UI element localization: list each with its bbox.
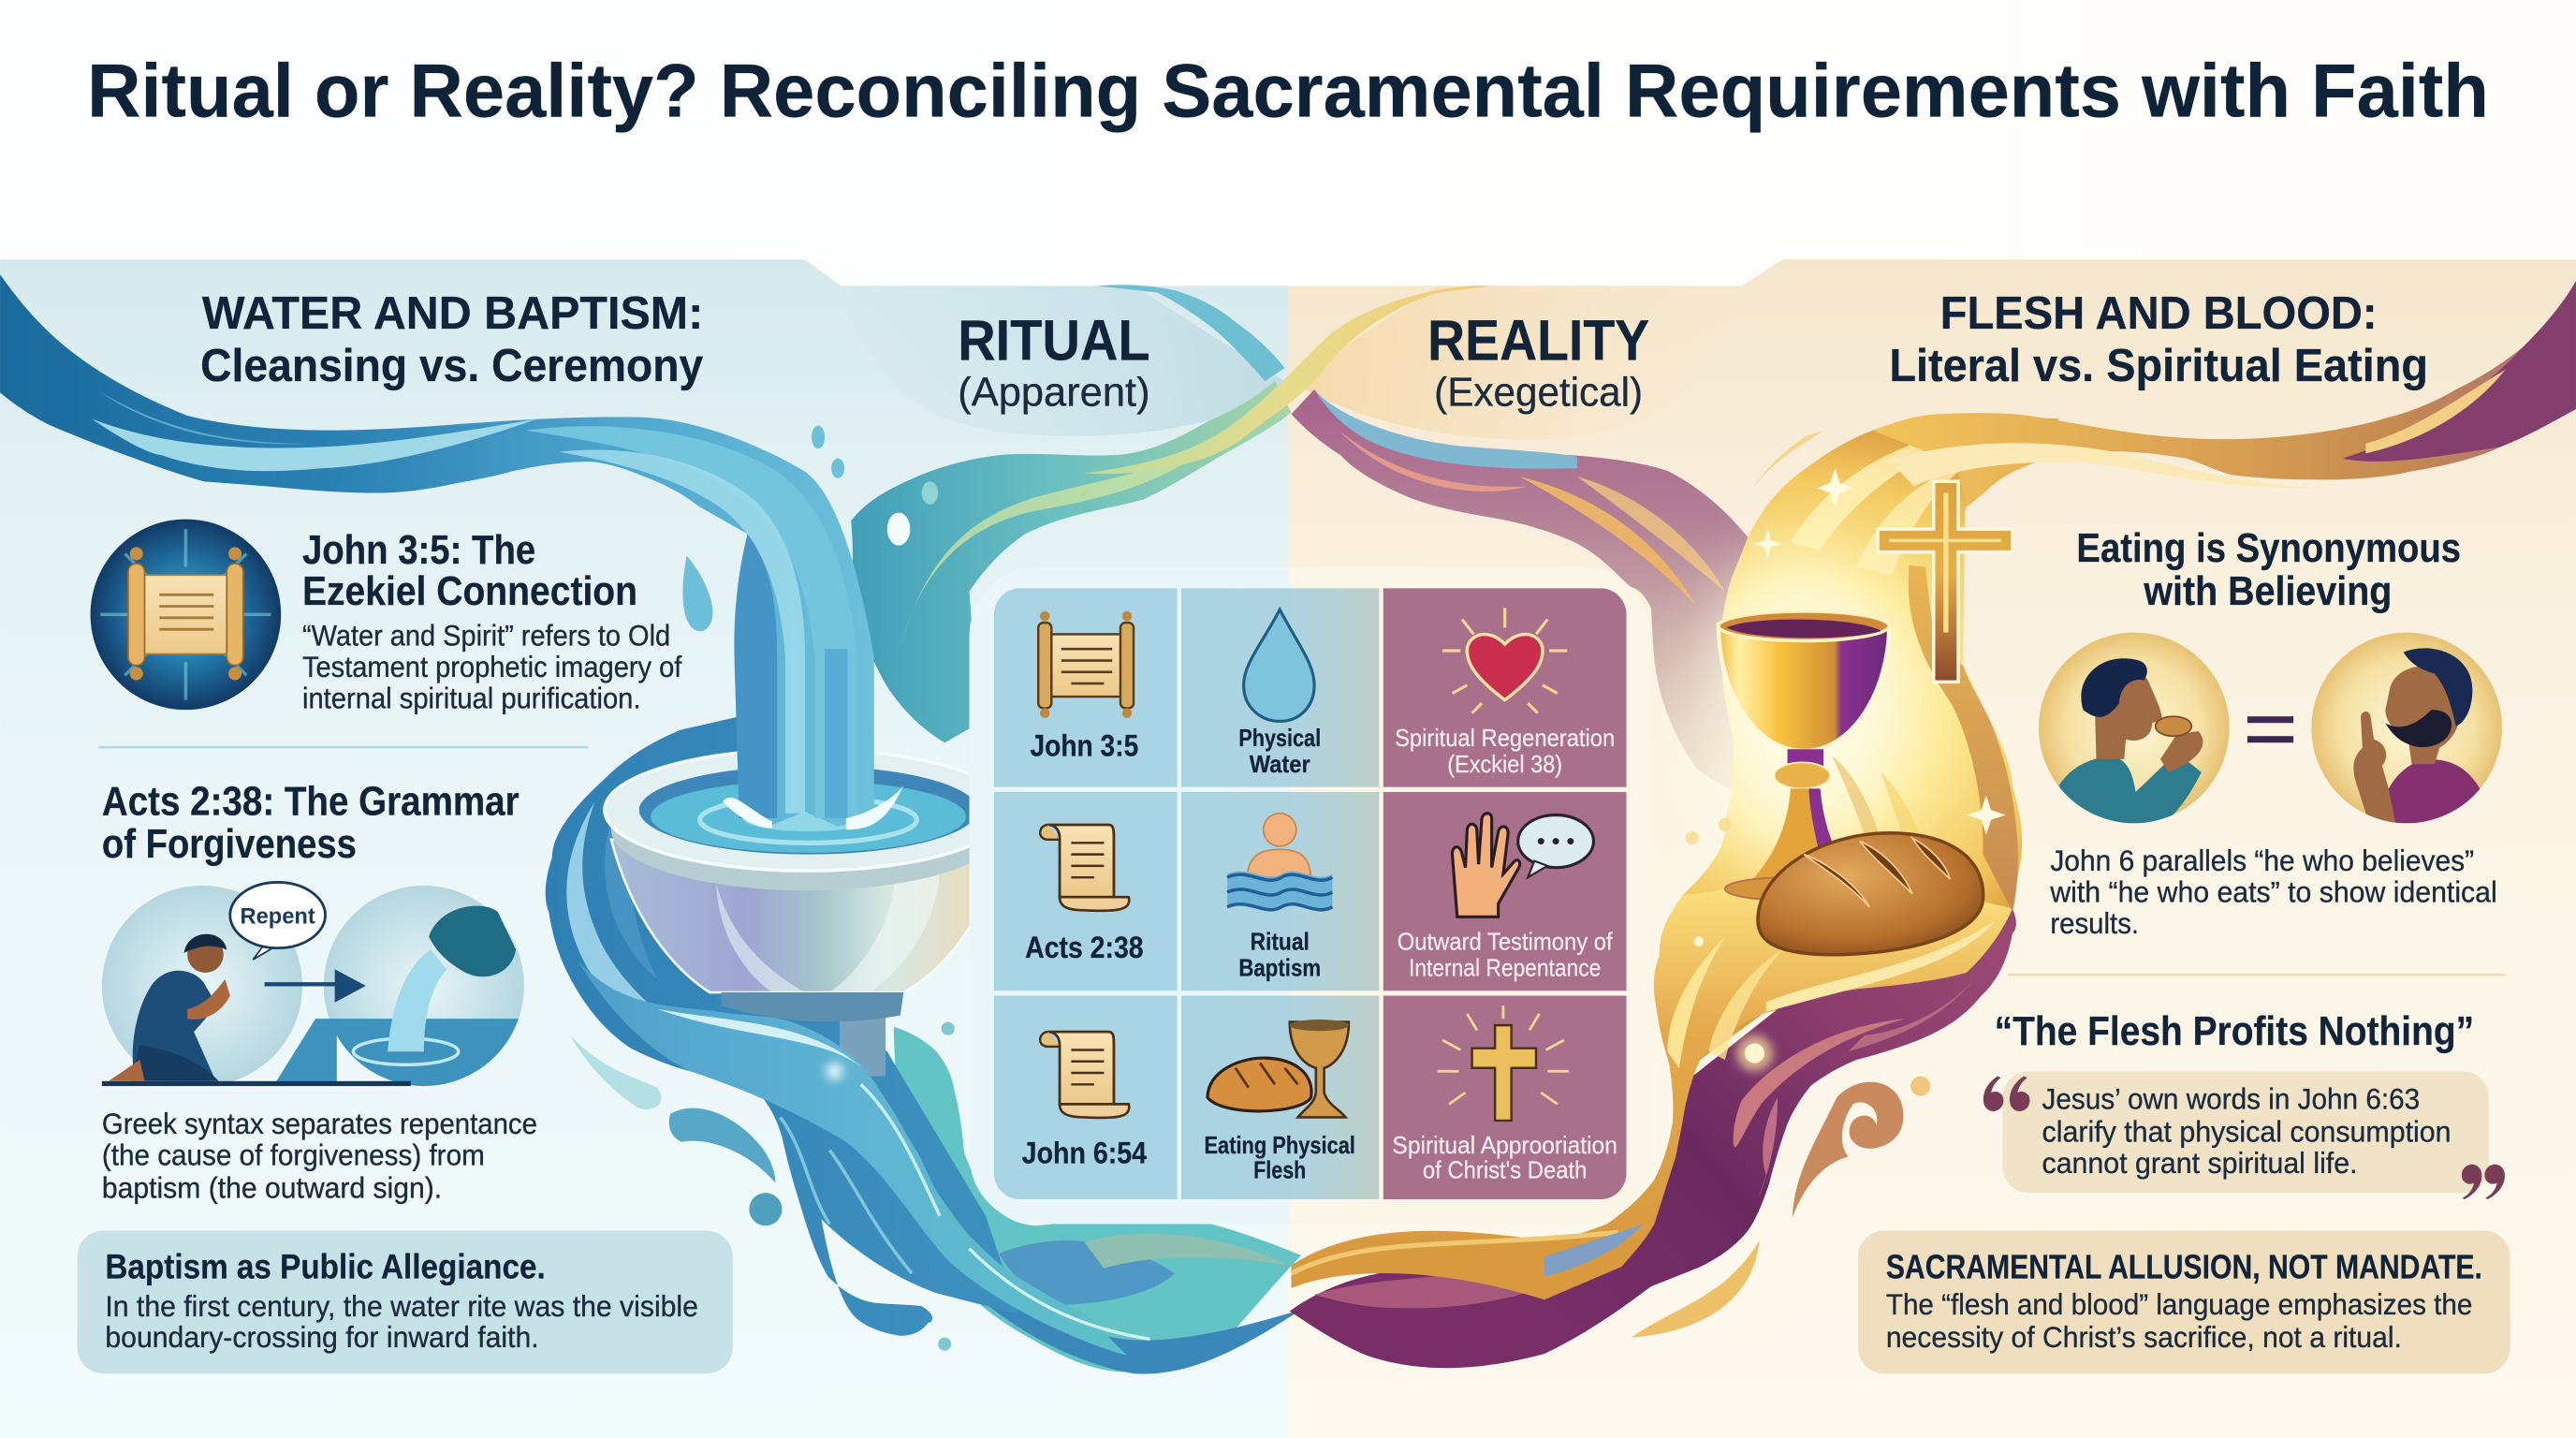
label: eating physical flesh [1204,1133,1355,1183]
centre heading: reality [1427,308,1649,415]
label: spiritual appropriation: Spiritual Approoriation [1392,1133,1617,1159]
centre swoosh: teal ribbon [851,381,1292,742]
front water stream over stem [578,961,1150,1356]
label: physical water: Physical [1238,726,1321,752]
quote box: Jesus’ own words in John 6:63 [2042,1082,2420,1116]
label: John 6:54: John 6:54 [1022,1137,1147,1170]
Acts 2:38 heading [102,778,520,867]
Greek syntax text: (the cause of forgiveness) from [102,1137,485,1171]
label: eating physical flesh: Eating Physical [1204,1133,1355,1159]
callout: sacramental allusion: The “flesh and blood” language emphasizes the [1886,1287,2472,1321]
label: outward testimony: Internal Repentance [1409,955,1601,981]
Acts 2:38 heading: of Forgiveness [102,821,357,867]
John 3:5 text block: John 3:5: The [302,527,535,573]
callout: public allegiance: Baptism as Public Allegiance. [105,1247,546,1285]
Acts 2:38 heading: Acts 2:38: The Grammar [102,778,520,824]
centre heading: reality: (Exegetical) [1434,369,1643,415]
John 6 text: results. [2050,906,2139,940]
icon: scroll John 3:5 [1038,611,1134,718]
bread loaf [1758,833,1983,955]
label: John 3:5: John 3:5 [1030,728,1138,762]
label: spiritual appropriation [1392,1133,1617,1183]
label: ritual baptism: Baptism [1238,955,1321,981]
comparison table [994,588,1627,1199]
table halo [970,566,1651,1224]
quote box [1983,1071,2505,1199]
label: outward testimony: Outward Testimony of [1398,929,1613,955]
flame ribbon right side [1909,565,2018,912]
icon: water drop [1244,609,1314,721]
flesh profits nothing heading: “The Flesh Profits Nothing” [1995,1008,2474,1054]
centre swoosh: blue arc and yellow crossing ribbon [1084,285,1492,474]
callout: public allegiance: In the first century, the water rite was the visible [105,1289,698,1323]
quote box: cannot grant spiritual life. [2042,1146,2358,1180]
illustration: repentance to baptism [102,882,534,1093]
illustration: repentance to baptism: Repent [241,904,315,929]
water stream: top left sweep into column [0,274,903,829]
right panel heading: FLESH AND BLOOD: [1940,288,2378,339]
callout: public allegiance: boundary-crossing for inward faith. [105,1320,539,1354]
label: spiritual regeneration [1395,726,1615,778]
cross behind chalice [1880,483,2011,681]
callout: sacramental allusion: SACRAMENTAL ALLUSION, NOT MANDATE. [1886,1247,2482,1285]
purple ribbon tail [1290,909,2016,1368]
John 3:5 text block [302,527,682,714]
John 6 text [2049,844,2497,940]
icon: opening quote [1983,1077,2029,1111]
quote box: clarify that physical consumption [2042,1115,2452,1149]
centre heading: reality: REALITY [1427,308,1649,373]
icon: bread and cup [1208,1020,1349,1117]
water flow wrapping behind the bowl [546,714,1018,1336]
icon: raised hand and speech bubble [1453,814,1593,917]
icon: scroll Acts 2:38 [1040,825,1129,911]
centre heading: ritual [958,308,1150,415]
title: Ritual or Reality? Reconciling Sacramental Requirements with Faith [87,50,2489,134]
John 3:5 text block: internal spiritual purification. [302,681,641,714]
icon: glowing heart [1442,608,1567,713]
John 6 text: John 6 parallels “he who believes” [2050,844,2474,877]
eating is synonymous heading [2076,525,2461,614]
gold tail of flame [1292,871,2012,1299]
gold band at top right [1873,281,2576,506]
label: outward testimony [1398,929,1613,981]
John 3:5 text block: “Water and Spirit” refers to Old [302,619,670,653]
illustration: eating equals believing [2039,633,2502,838]
Greek syntax text: Greek syntax separates repentance [102,1107,537,1140]
label: spiritual regeneration: (Exckiel 38) [1447,752,1562,778]
centre swoosh: mauve ribbon fading behind chalice [1292,389,1782,812]
icon: glowing scroll disc [91,520,281,710]
icon: person in baptism water [1227,814,1332,911]
icon: glowing cross [1438,1005,1569,1121]
left panel heading [200,288,704,391]
lower teal band under the table [894,1027,1301,1374]
water droplets and splashes [570,426,955,1351]
left panel heading: Cleansing vs. Ceremony [200,341,704,391]
table cells [994,588,1627,1199]
eating is synonymous heading: Eating is Synonymous [2076,525,2461,571]
label: physical water [1238,726,1321,778]
John 6 text: with “he who eats” to show identical [2049,875,2497,909]
centre heading: ritual: (Apparent) [958,369,1150,415]
callout: public allegiance [78,1231,733,1373]
Greek syntax text: baptism (the outward sign). [102,1170,442,1204]
label: spiritual regeneration: Spiritual Regeneration [1395,726,1615,752]
eating is synonymous heading: with Believing [2143,568,2392,614]
label: ritual baptism [1238,929,1321,981]
Greek syntax text [102,1107,537,1204]
label: spiritual appropriation: of Christ's Death [1423,1157,1587,1183]
icon: closing quote [2462,1165,2505,1199]
label: physical water: Water [1250,752,1310,778]
John 3:5 text block: Ezekiel Connection [302,568,637,614]
label: Acts 2:38: Acts 2:38 [1025,931,1144,964]
callout: sacramental allusion [1858,1231,2510,1373]
label: eating physical flesh: Flesh [1253,1157,1306,1183]
sparkles [1686,468,2006,844]
swirl ornament [1793,1077,1930,1217]
gold leaf [1632,1240,1760,1338]
label: ritual baptism: Ritual [1251,929,1310,955]
water bowl [605,749,1009,1077]
centre heading: ritual: RITUAL [958,308,1150,373]
callout: sacramental allusion: necessity of Christ’s sacrifice, not a ritual. [1886,1320,2402,1354]
right panel heading [1889,288,2428,391]
left panel heading: WATER AND BAPTISM: [202,288,703,339]
right panel heading: Literal vs. Spiritual Eating [1889,341,2428,391]
chalice [1719,611,1889,901]
icon: scroll John 6:54 [1040,1032,1129,1118]
gold flame around chalice [1654,414,2060,1064]
John 3:5 text block: Testament prophetic imagery of [302,650,682,683]
